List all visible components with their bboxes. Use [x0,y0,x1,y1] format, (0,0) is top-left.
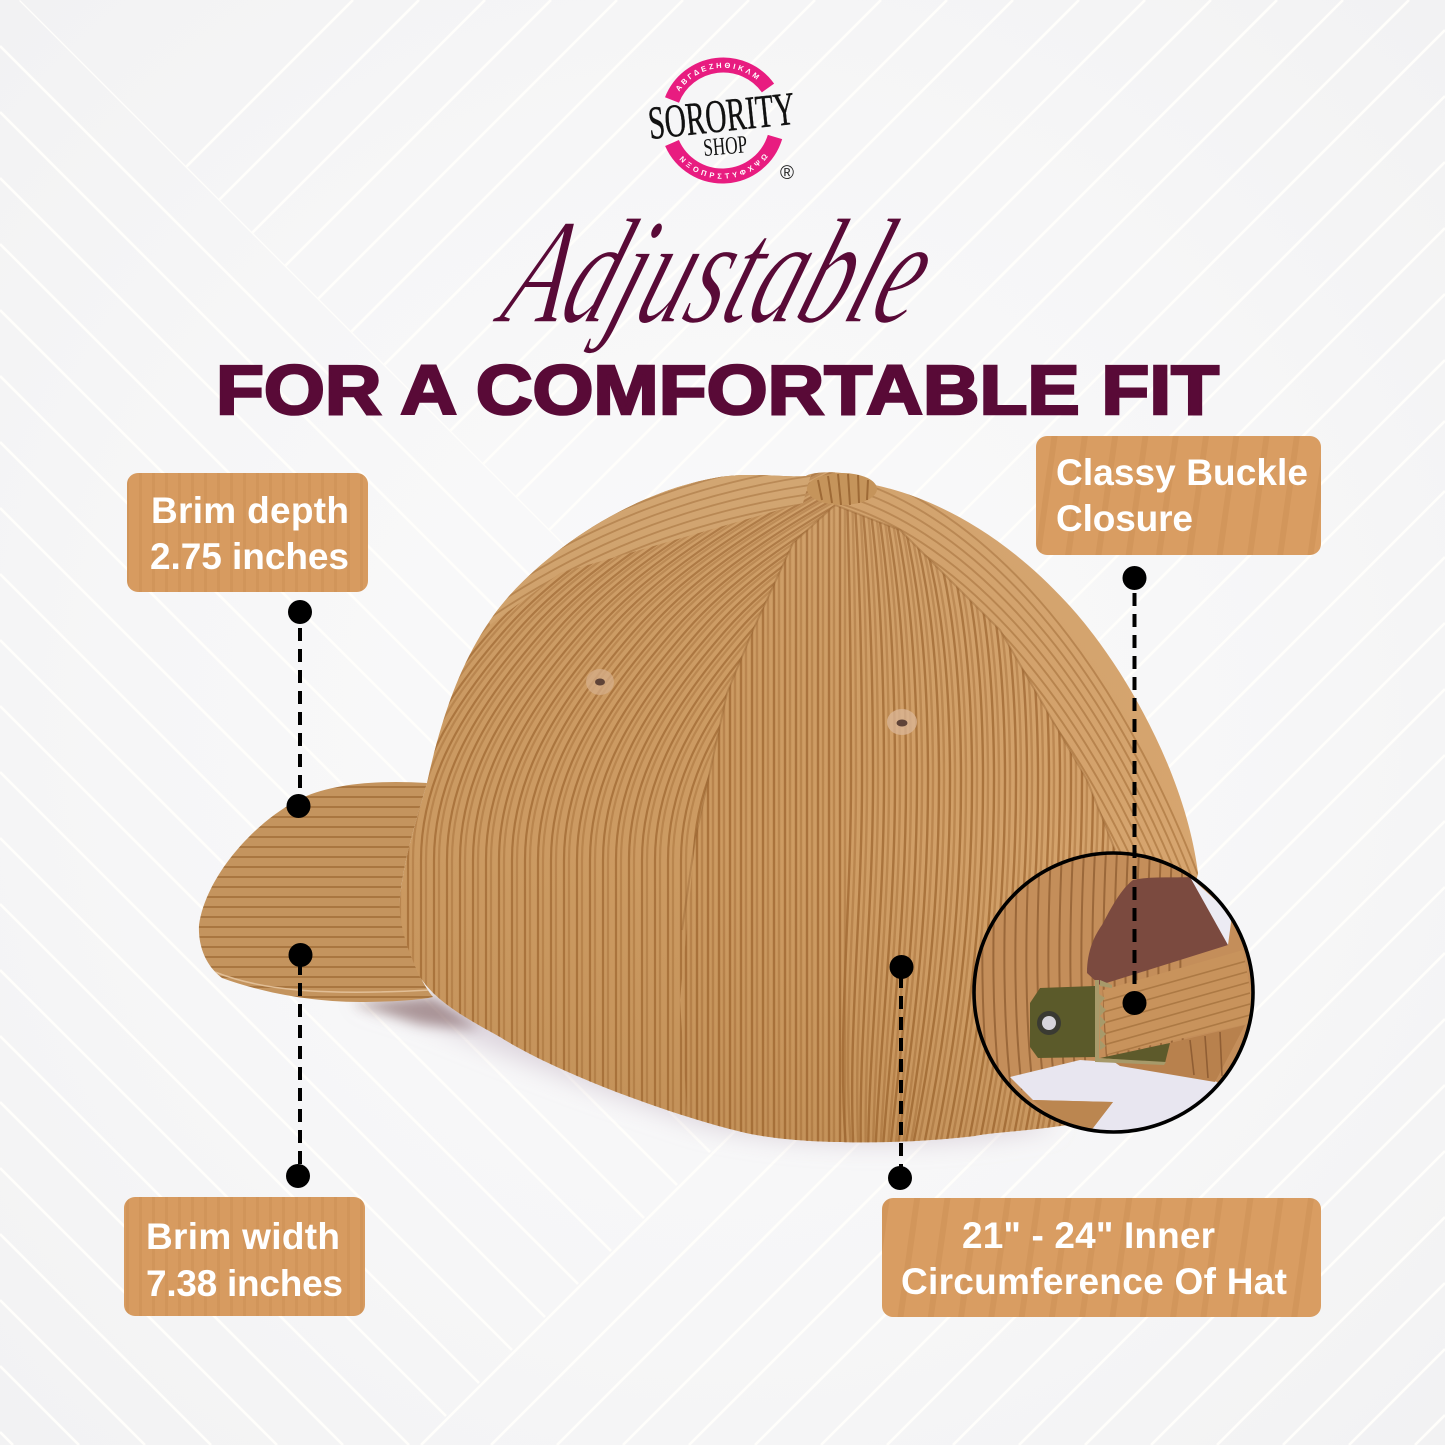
callout: inner circumference [882,1198,1321,1317]
left panel corduroy [400,472,835,1116]
eyelet right [887,709,917,735]
crown button [807,473,877,505]
eyelet left [586,669,614,695]
center panel corduroy [684,506,1115,1142]
buckle plate [1030,986,1095,1058]
logo: Sorority Shop: SHOP [702,131,748,162]
inset ring [974,853,1253,1132]
callout: classy buckle closure [1036,436,1321,555]
hat crown [400,472,1198,1142]
main heading: FOR A COMFORTABLE FIT [216,351,1219,429]
inset: buckle closure close-up [970,850,1260,1140]
panel seams [682,505,1115,930]
buckle bar [1095,980,1166,1065]
hat shadow [350,1000,1060,1144]
logo: Sorority Shop: SORORITY [646,83,797,150]
right panel corduroy [842,488,1198,876]
back edge piece [1033,1100,1113,1128]
lower strap [1107,1025,1245,1082]
script heading: Adjustable: Adjustable [479,188,958,355]
callout: inner circumference: 21" - 24" Inner [962,1215,1215,1256]
inset corduroy [982,850,1187,1090]
inner lining sliver [1190,877,1232,945]
callout: brim depth: 2.75 inches [150,536,349,577]
measure line: brim width [286,943,312,1188]
buckle lower plate [1100,1043,1170,1063]
callout: inner circumference: Circumference Of Hat [901,1261,1287,1302]
measure line: brim depth [286,600,312,818]
hat illustration [190,413,1210,1160]
callout: classy buckle closure: Classy Buckle [1056,452,1308,493]
logo: Sorority Shop [646,58,797,184]
callout: brim depth [127,473,368,592]
logo: Sorority Shop: ® [780,163,794,184]
logo: Sorority Shop: ΑΒΓΔΕΖΗΘΙΚΛΜ [676,62,760,92]
callout: brim width: 7.38 inches [146,1263,343,1304]
measure line: circumference [888,955,914,1190]
top panel corduroy [489,474,811,625]
callout: classy buckle closure: Closure [1056,498,1193,539]
callout: brim depth: Brim depth [151,490,349,531]
cap opening [1087,877,1228,985]
hat brim [198,782,433,1002]
logo: Sorority Shop: ΝΞΟΠΡΣΤΥΦΧΨΩ [679,154,768,179]
white lining below [1010,1060,1218,1130]
grommet [1037,1011,1061,1035]
callout: brim width: Brim width [146,1216,340,1257]
callout: brim width [124,1197,365,1316]
strap [1103,960,1250,1055]
brim shadow [350,997,480,1030]
measure line: buckle [1122,566,1146,1015]
